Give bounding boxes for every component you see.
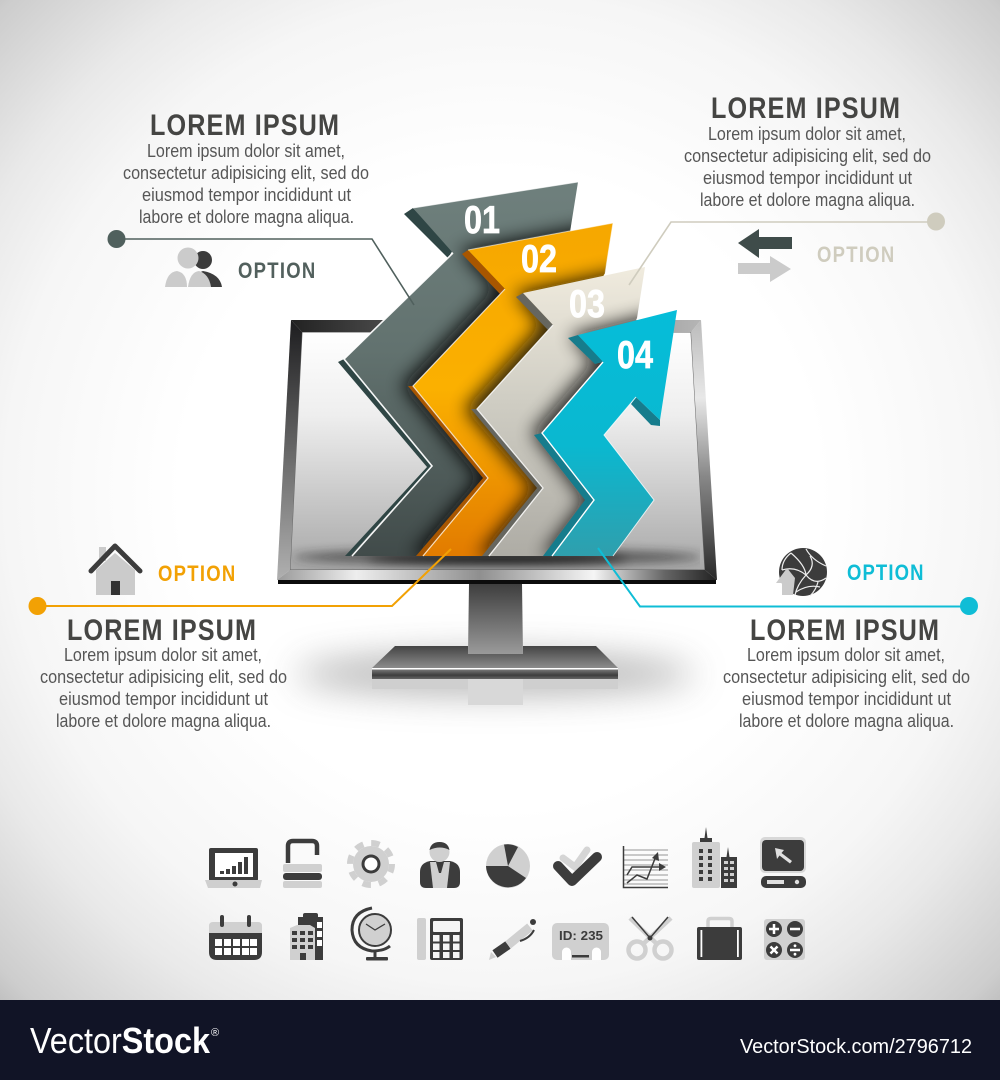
heading: LOREM IPSUM: [750, 613, 939, 646]
body: consectetur adipisicing elit, sed do: [723, 667, 970, 687]
number 02: 02: [521, 238, 557, 281]
icon: computer cursor: [760, 837, 806, 888]
footer bar: [0, 1000, 1000, 1080]
stand reflection: [372, 679, 618, 705]
footer logo: VectorStock: [30, 1020, 211, 1061]
icon: head network: [776, 548, 827, 596]
leader line cyan: [598, 548, 978, 615]
body: consectetur adipisicing elit, sed do: [684, 146, 931, 166]
body: labore et dolore magna aliqua.: [56, 711, 271, 731]
body: consectetur adipisicing elit, sed do: [123, 163, 369, 183]
option label beige: OPTION: [817, 244, 894, 267]
text block bottom right: [723, 613, 970, 731]
stand neck: [468, 584, 523, 654]
arrow 01 grey: [338, 182, 578, 556]
screen: [290, 332, 705, 570]
icon: businessman: [420, 842, 460, 888]
frame: [277, 320, 717, 584]
body: [723, 645, 970, 731]
monitor: [277, 320, 717, 705]
icon row 2: [209, 908, 805, 960]
body: eiusmod tempor incididunt ut: [142, 185, 351, 205]
icon: open lock: [283, 841, 322, 888]
body: [684, 124, 931, 210]
text block top right: [684, 91, 931, 210]
arrow 04 cyan: [534, 310, 677, 556]
icon: id card: ID: 235: [559, 928, 603, 943]
leader line grey: [108, 230, 414, 305]
icon: scissors: [628, 917, 672, 958]
body: [123, 141, 369, 227]
icon row 1: [205, 827, 806, 888]
icon: gear: [350, 843, 392, 885]
shadow of arrow 02: [394, 216, 572, 556]
body: labore et dolore magna aliqua.: [139, 207, 354, 227]
icon: check mark: [558, 850, 597, 881]
icon: briefcase: [697, 918, 742, 960]
icon: calendar: [209, 917, 262, 960]
registered mark: ®: [211, 1027, 219, 1039]
body: Lorem ipsum dolor sit amet,: [64, 645, 262, 665]
body: eiusmod tempor incididunt ut: [742, 689, 951, 709]
arrow 03 beige: [471, 267, 645, 556]
stand base: [372, 646, 618, 679]
footer id: VectorStock.com/2796712: [740, 1036, 972, 1058]
icon: house: [91, 546, 140, 595]
option label orange: OPTION: [158, 563, 235, 586]
shadow of arrow 03: [465, 267, 637, 556]
option label cyan: OPTION: [847, 562, 923, 585]
leader line orange: [28, 549, 451, 615]
screen shadow: [292, 549, 702, 565]
icon: laptop chart: [205, 848, 262, 888]
arrow 02 orange: [408, 223, 613, 556]
icon: pie chart: [486, 844, 530, 888]
shadow of arrow 04: [522, 302, 639, 556]
heading: LOREM IPSUM: [711, 91, 900, 124]
text block top left: [123, 108, 369, 227]
icon: line chart: [624, 846, 668, 888]
heading: LOREM IPSUM: [67, 613, 256, 646]
body: consectetur adipisicing elit, sed do: [40, 667, 287, 687]
body: eiusmod tempor incididunt ut: [59, 689, 268, 709]
icon: pen: [489, 919, 536, 960]
body: labore et dolore magna aliqua.: [700, 190, 915, 210]
icon: globe clock: [352, 908, 391, 960]
body: Lorem ipsum dolor sit amet,: [147, 141, 345, 161]
number 04: 04: [617, 334, 653, 377]
body: Lorem ipsum dolor sit amet,: [747, 645, 945, 665]
body: eiusmod tempor incididunt ut: [703, 168, 912, 188]
icon: math symbols: [764, 919, 805, 960]
text block bottom left: [40, 613, 287, 731]
body: Lorem ipsum dolor sit amet,: [708, 124, 906, 144]
icon: office building: [290, 913, 323, 960]
desk shadow: [295, 654, 695, 694]
icon: city buildings: [692, 827, 737, 888]
body: labore et dolore magna aliqua.: [739, 711, 954, 731]
body: [40, 645, 287, 731]
leader line beige: [629, 212, 945, 285]
number 03: 03: [569, 283, 605, 326]
icon: id card: [552, 923, 609, 960]
icon: people: [165, 248, 222, 287]
number 01: 01: [464, 199, 500, 242]
icon: calculator: [417, 918, 463, 960]
option label grey: OPTION: [238, 260, 315, 283]
icon: swap arrows: [738, 229, 792, 282]
heading: LOREM IPSUM: [150, 108, 339, 141]
